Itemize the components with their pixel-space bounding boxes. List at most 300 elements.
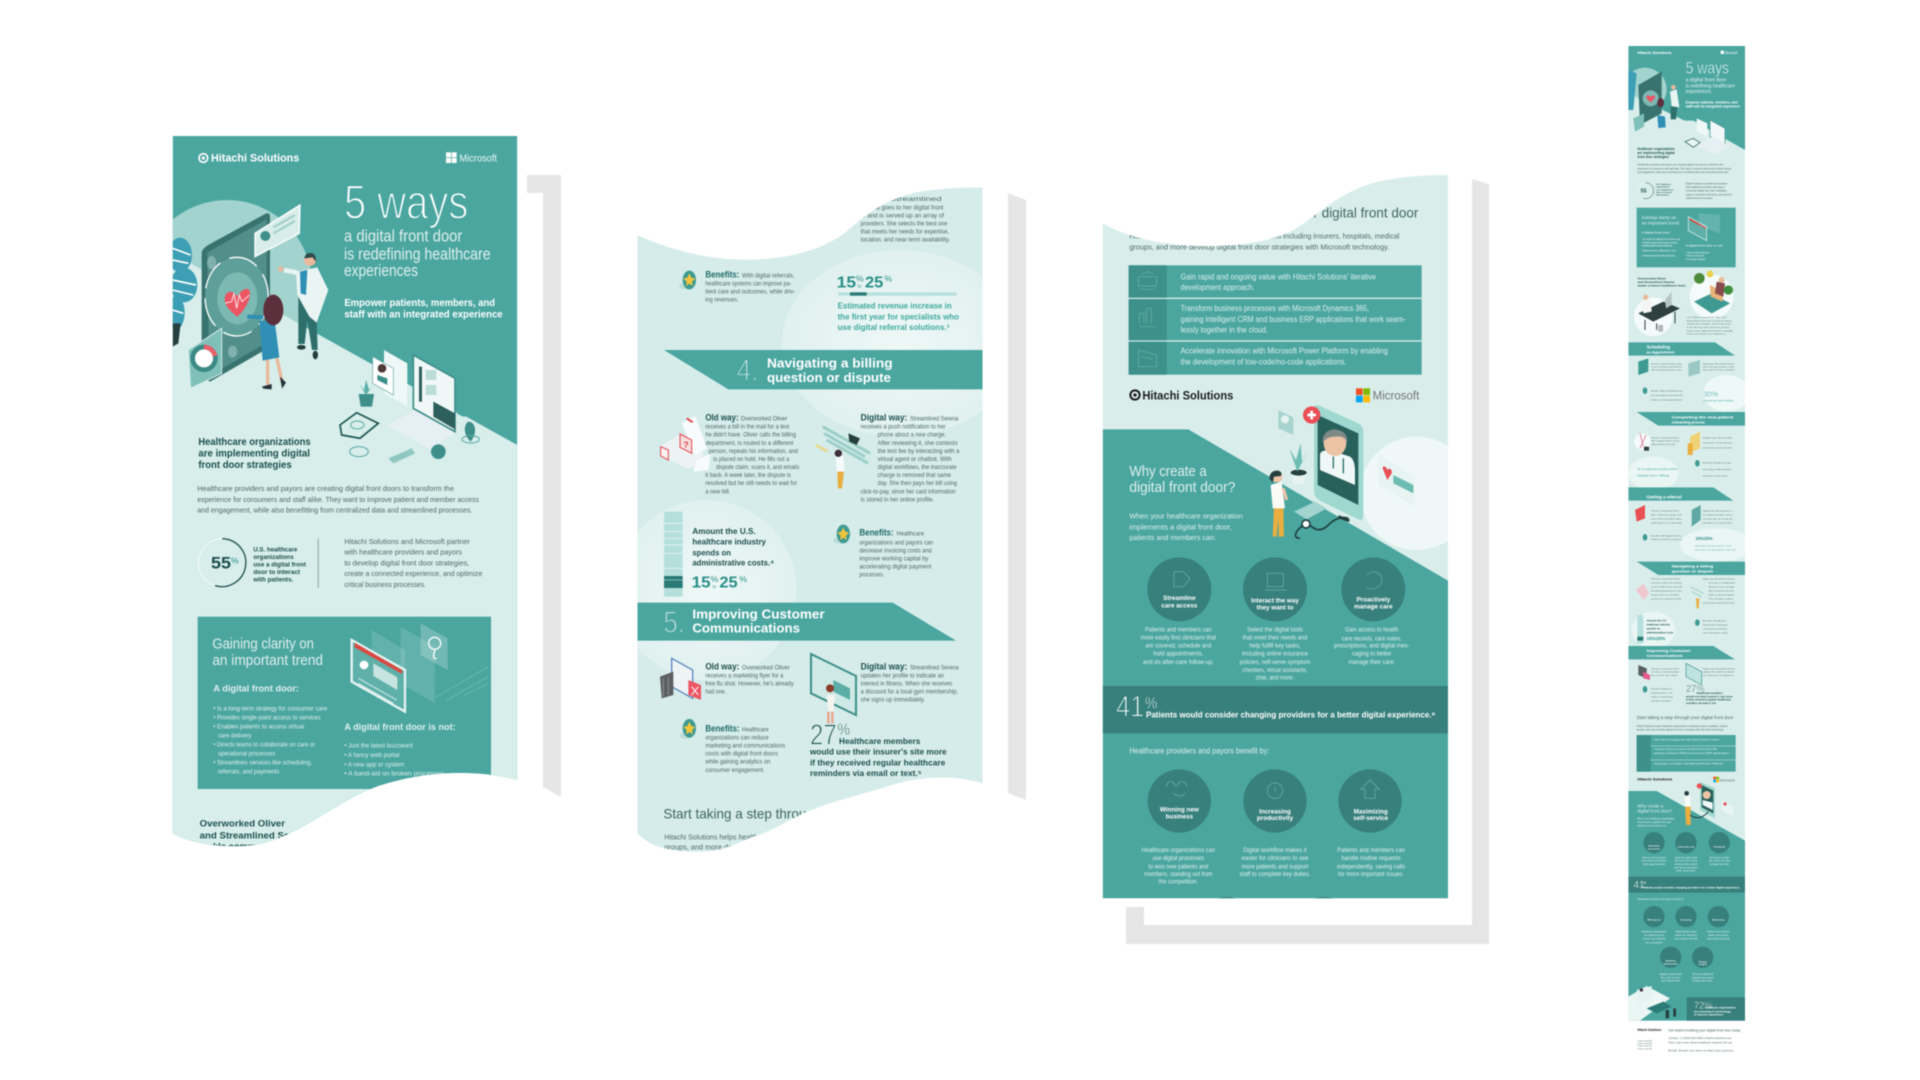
circle: winning new business: business xyxy=(1166,813,1194,820)
text: self-service description: independently, saving calls xyxy=(1337,863,1405,870)
illustration: plant leaves xyxy=(172,237,198,347)
text: streamline description: are covered, schedule and xyxy=(1145,643,1212,650)
list: what it is: • Directs teams to collaborate on care or xyxy=(213,742,316,749)
thumbnail band: completing the onboarding process: Completing the new-patient xyxy=(1672,414,1734,419)
thumbnail circles row two: Patients and members xyxy=(1707,931,1730,934)
thumbnail logos: Hitachi Solutions xyxy=(1637,777,1673,782)
text: proactively description: Gain access to health xyxy=(1345,627,1399,634)
heading: why create xyxy=(1129,463,1235,496)
illustration: phone with heart xyxy=(202,213,270,382)
heading: start taking a step: Start taking a step through your digital front door xyxy=(1130,204,1419,220)
text: benefits billing: accelerating digital payment xyxy=(859,564,932,571)
text: interact description: policies, self-serve symptom xyxy=(1240,659,1310,666)
text: old way billing: Old way: xyxy=(705,413,739,423)
text: benefits digital referrals xyxy=(705,269,795,303)
thumbnail section: communications content: receives a marketing flyer xyxy=(1651,671,1680,674)
text: benefits communications: marketing and communications xyxy=(705,742,785,749)
text: old way billing: is placed on hold. He fills out a xyxy=(713,456,790,463)
thumbnail text: intro: experience for consumers and staff alike. They want to improve patient and member access xyxy=(1637,166,1732,170)
stat: revenue increase number: to xyxy=(858,284,862,289)
circle: winning new business xyxy=(1148,769,1211,833)
text: old way marketing: free flu shot. However, he's already xyxy=(705,681,794,688)
thumbnail band: getting a referral xyxy=(1628,487,1733,501)
thumbnail footer: Contact: +1 (000) 000-0000 | hitachi-solutions.com xyxy=(1668,1037,1732,1040)
text: digital way marketing: Digital way: xyxy=(861,661,907,671)
thumbnail circles row three: experiences grow xyxy=(1692,976,1714,979)
thumbnail section: communications content: for a free flu shot xyxy=(1651,674,1678,677)
circle tops: next row xyxy=(1195,897,1355,960)
thumbnail section: communications content xyxy=(1638,663,1736,705)
stat: administrative costs caption xyxy=(692,526,774,568)
thumbnail callout: A digital front door: xyxy=(1642,231,1670,235)
thumbnail title: Empower patients, members, and xyxy=(1686,100,1737,104)
heading: implementing strategies: are implementing digital xyxy=(198,449,310,460)
thumbnail circles row three: insights xyxy=(1699,963,1708,966)
thumbnail circles row one: care records, care notes xyxy=(1708,860,1731,863)
list: what it is: care delivery xyxy=(218,733,252,740)
icon: benefit star badge xyxy=(833,525,850,544)
illustration: paper bill xyxy=(661,416,711,472)
thumbnail section: billing content xyxy=(1632,577,1736,648)
thumbnail section: billing content: and she pays using click-to-pay xyxy=(1703,601,1735,604)
text: benefits communications: organizations can reduce xyxy=(705,734,769,741)
illustration: flyer and trash xyxy=(660,658,701,700)
thumbnail text: intro: and engagement, while also benefitting from centralized data and streamlined processes. xyxy=(1637,170,1729,174)
text: benefits digital referrals: healthcare systems can improve pa- xyxy=(705,280,791,287)
text: streamline description: and do after-care follow-up. xyxy=(1143,659,1214,666)
partner paragraph: create a connected experience, and optimize xyxy=(344,569,482,578)
thumbnail section: referral content: providers to choose from xyxy=(1703,522,1732,525)
text: interact description: checkers, virtual assistants, xyxy=(1242,667,1308,674)
thumbnail stat: healthcare organizations 72 percent: Healthcare organizations xyxy=(1705,1006,1736,1009)
stat band: 41 percent: Patients would consider changing providers for a better digital experience.⁶ xyxy=(1146,709,1435,719)
text: benefit by heading: Healthcare providers and payors benefit by: xyxy=(1129,746,1269,755)
thumbnail circles row two: Digital workflow makes xyxy=(1675,931,1697,934)
thumbnail circles row two: more patients and staff xyxy=(1675,937,1698,940)
icon: benefit star badge xyxy=(679,271,696,289)
stat: 15 to 25 percent: to xyxy=(713,584,717,589)
illustration: shield and small icons xyxy=(340,413,479,463)
thumbnail band: improving customer communications xyxy=(1628,646,1735,659)
text: digital way marketing: updates her profile to indicate an xyxy=(861,673,944,680)
text: benefits billing: organizations and payors can xyxy=(859,539,934,546)
thumbnail section: communications content: Digital way: Streamlined Serena xyxy=(1703,667,1736,670)
text: when your organization: implements a digital front door, xyxy=(1129,522,1232,531)
intro paragraph: Healthcare providers and payors are creating digital front doors to transform the xyxy=(197,484,454,493)
subtitle: a digital front door xyxy=(344,227,463,246)
list: what it is: • Enables patients to access virtual xyxy=(213,724,304,731)
thumbnail circles row two: use digital processes xyxy=(1644,934,1665,937)
text: winning description: members, standing out from xyxy=(1144,871,1212,878)
circle: proactively manage care xyxy=(1341,557,1405,621)
thumbnail section: start taking a step: Transform business processes with Microsoft Dynamics 365, xyxy=(1654,748,1718,751)
thumbnail stat: 55 percent xyxy=(1638,181,1732,200)
text: Serena digital referral: that meets her needs for expertise, xyxy=(861,229,949,236)
thumbnail section: Oliver and Serena: visiting the hospital. Oliver's journey xyxy=(1687,323,1732,326)
text: benefits billing: processes. xyxy=(859,571,885,578)
list: what it is: • Provides single-point access to services xyxy=(213,715,321,722)
text: benefits digital referrals: Benefits: xyxy=(705,269,739,279)
thumbnail section: billing content: spends on xyxy=(1647,629,1661,631)
illustration: heart chart card xyxy=(1378,455,1415,507)
thumbnail section: scheduling content: opens the app and picks a time xyxy=(1703,365,1735,368)
illustration: standing patient xyxy=(1269,471,1287,537)
thumbnail why create: When your healthcare organization xyxy=(1637,817,1675,820)
text: productivity description: Digital workflow makes it xyxy=(1243,847,1307,854)
thumbnail why create: patients and members can: xyxy=(1637,825,1667,828)
thumbnail section: Oliver and Serena: Let's follow Overworked Oliver and xyxy=(1687,316,1727,319)
section band: navigating a billing question: 4. xyxy=(737,354,758,388)
thumbnail section: scheduling content: office during work hours, then xyxy=(1651,368,1683,371)
intro paragraph: experience for consumers and staff alike. They want to improve patient and member access xyxy=(197,495,479,504)
circle: maximizing self-service: self-service xyxy=(1353,815,1389,822)
stat: 55 percent ring: % xyxy=(231,556,239,566)
tagline: staff with an integrated experience xyxy=(344,309,503,320)
chart: revenue range bar xyxy=(838,292,957,296)
thumbnail illustration: hero xyxy=(1628,70,1730,155)
thumbnail section: referral content: first year for specialists who use xyxy=(1695,549,1737,552)
text: streamline description: more easily find clinicians that xyxy=(1141,635,1216,642)
subtitle xyxy=(344,227,491,280)
stat: revenue increase number: 15 xyxy=(837,274,856,291)
stat: administrative costs caption: Amount the U.S. xyxy=(692,526,756,536)
thumbnail callout: • A fancy web portal xyxy=(1686,255,1704,258)
thumbnail circles row three: Reducing xyxy=(1666,961,1676,963)
text: benefits digital referrals: With digital referrals, xyxy=(742,272,795,279)
thumbnail callout: • Enables patients to access virtual care xyxy=(1642,245,1673,248)
stat band: 41 percent xyxy=(1103,686,1448,733)
thumbnail callout: A digital front door is not: xyxy=(1686,244,1723,248)
thumbnail band: improving customer communications: Communications xyxy=(1647,653,1684,658)
thumbnail callout: • Streamlines services like scheduling xyxy=(1642,255,1676,258)
thumbnail section: billing content: The charge is gone xyxy=(1708,597,1734,600)
thumbnail callout: • Just the latest buzzword xyxy=(1686,251,1710,254)
thumbnail section: scheduling content xyxy=(1638,358,1750,412)
text: winning description: Healthcare organizations can xyxy=(1142,847,1215,854)
row: Power Platform xyxy=(1129,342,1422,375)
thumbnail why create xyxy=(1637,782,1733,828)
thumbnail circles row two: easier for clinicians xyxy=(1675,934,1698,937)
thumbnail section: billing content: the billing department, who xyxy=(1651,589,1683,592)
text: productivity description xyxy=(1240,847,1311,878)
list: what it is not: • A new app or system xyxy=(344,761,405,768)
illustration: floating profile card xyxy=(255,205,300,257)
thumbnail circles row two: the competition xyxy=(1645,941,1663,944)
thumbnail text: intro: Healthcare providers and payors are creating digital front doors to transform the xyxy=(1637,163,1724,167)
text: digital way marketing: interest in fitness. When she receives xyxy=(861,681,953,688)
illustration: translucent screens and card xyxy=(352,623,488,712)
stat: administrative costs caption: healthcare industry xyxy=(692,536,766,546)
text: old way billing: he didn't have. Oliver calls the billing xyxy=(705,432,796,439)
section band: improving customer communications: 5. xyxy=(663,606,685,640)
row: Dynamics 365: lessly together in the cloud. xyxy=(1181,326,1268,335)
thumbnail section: referral content: healthcare systems can improve xyxy=(1651,538,1682,541)
thumbnail section: billing content: Old way: Overworked Oliver xyxy=(1651,577,1681,580)
stat caption: revenue: the first year for specialists who xyxy=(838,312,959,322)
grey bracket: third page shadow xyxy=(1126,179,1489,944)
text: proactively description: saging to better xyxy=(1352,651,1391,658)
text: interact description: help fulfill key tasks, xyxy=(1249,643,1301,650)
thumbnail title: experiences xyxy=(1686,89,1711,95)
thumbnail circles row one: care access xyxy=(1648,848,1661,850)
thumbnail circles row two: to woo new patients xyxy=(1643,937,1666,940)
text: benefits communications xyxy=(704,724,785,774)
circle: increasing productivity xyxy=(1243,769,1307,833)
thumbnail stat band: 41 percent xyxy=(1628,877,1745,893)
text: digital way billing: day. She then pays her bill using xyxy=(878,480,957,487)
thumbnail stat: 55 percent: with patients. xyxy=(1656,194,1670,197)
text: old way billing: department, is routed to a different xyxy=(705,440,793,447)
thumbnail circles row one: including online policies xyxy=(1674,864,1698,866)
text: old way billing: person, repeats his information, and xyxy=(709,448,798,455)
thumbnail callout xyxy=(1637,208,1736,267)
illustration: telehealth phone with doctor xyxy=(1278,405,1363,520)
panel: page two billing and communications xyxy=(636,187,984,852)
thumbnail section: start taking a step: Accelerate innovation with Microsoft Power Platform xyxy=(1654,763,1723,766)
row: Power Platform: the development of low-code/no-code applications. xyxy=(1181,357,1346,366)
thumbnail section: scheduling content: reduces missed appointments. xyxy=(1651,398,1683,401)
thumbnail circles row three xyxy=(1659,947,1714,983)
thumbnail section: onboarding content: fills in paper forms at the xyxy=(1651,440,1680,443)
thumbnail circles row one: chat, and more. xyxy=(1676,870,1696,873)
row: Dynamics 365: gaining intelligent CRM and business ERP applications that work seam- xyxy=(1181,315,1406,324)
thumbnail section: onboarding content: office before his visit xyxy=(1651,443,1675,446)
text: Serena digital referral: providers. She selects the best one xyxy=(861,221,948,228)
thumbnail section: communications content: an interest in fitness xyxy=(1703,674,1733,677)
thumbnail stat: 55 percent: door to interact xyxy=(1656,191,1672,194)
panel: full infographic thumbnail xyxy=(1623,46,1753,1053)
text: old way billing: receives a bill in the mail for a test xyxy=(705,424,789,431)
text: self-service description xyxy=(1337,847,1405,878)
text: productivity description: more patients and support xyxy=(1242,863,1309,870)
thumbnail section: communications content: and gain analytics xyxy=(1651,699,1671,702)
thumbnail section: communications content: reduce marketing xyxy=(1651,695,1674,698)
text: interact description: that meet their needs and xyxy=(1243,635,1308,642)
section band: improving customer communications: Improving Customer xyxy=(692,607,825,621)
text: digital way marketing: she signs up immediately. xyxy=(861,697,925,704)
text: self-service description: handle routine requests xyxy=(1341,855,1401,862)
text: benefits communications: Benefits: xyxy=(705,724,740,734)
thumbnail circles row one: manage their care xyxy=(1710,863,1730,866)
thumbnail section: referral content: Digital way: Serena goes to xyxy=(1703,510,1733,513)
logo: Microsoft xyxy=(446,152,497,164)
thumbnail section: billing content: receives a bill in the mail for xyxy=(1651,581,1682,584)
stat caption: revenue: use digital referral solutions.³ xyxy=(838,322,950,332)
thumbnail callout: Gaining clarity on xyxy=(1642,215,1676,221)
thumbnail section: start taking a step: Hitachi Solutions helps healthcare organizations including insurers, hospitals, medical xyxy=(1637,725,1728,728)
panel: page three why create a digital front door xyxy=(1103,173,1473,960)
thumbnail section: scheduling content: 30% xyxy=(1703,390,1718,399)
thumbnail callout: • A new app or system xyxy=(1686,258,1706,261)
thumbnail stat band: 41 percent: Patients would consider changing providers for a better digital experience. xyxy=(1643,885,1740,889)
row: iterative development xyxy=(1129,265,1422,298)
thumbnail circles row one: Interact the way xyxy=(1678,845,1695,848)
thumbnail section: Oliver and Serena xyxy=(1634,271,1734,336)
thumbnail stat: healthcare organizations 72 percent: are investing in technology xyxy=(1694,1010,1731,1013)
chart: admin cost column xyxy=(664,512,683,597)
text: digital way marketing xyxy=(861,661,959,704)
heading: Oliver and Serena: and Streamlined Serena xyxy=(200,830,311,840)
text: digital way billing: is stored in her online profile. xyxy=(861,497,934,504)
thumbnail title: staff with an integrated experience xyxy=(1686,104,1740,108)
thumbnail section: billing content: costs and improve capital xyxy=(1703,632,1728,635)
thumbnail logos: Microsoft xyxy=(1720,778,1735,782)
thumbnail section: onboarding content: can reduce staff workload xyxy=(1703,468,1732,471)
thumbnail circles row two: Maximizing xyxy=(1713,920,1725,922)
thumbnail stat: 55 percent: organizations xyxy=(1656,186,1671,189)
stat: 55 percent ring xyxy=(198,539,246,587)
thumbnail header: Hitachi Solutions xyxy=(1637,51,1672,55)
thumbnail stat: 55 percent: use a digital front xyxy=(1656,188,1674,191)
text: self-service description: for more important issues. xyxy=(1338,871,1404,878)
text: digital way billing: virtual agent or chatbot. With xyxy=(878,456,952,463)
thumbnail stat: 55 percent: create a connected experience, and optimize xyxy=(1686,192,1732,196)
text: streamline description: Patients and members can xyxy=(1145,627,1212,634)
stat: 27 percent: reminders via email or text.⁵ xyxy=(810,768,922,778)
list: what it is: A digital front door: xyxy=(213,684,299,694)
text: benefits billing: decrease invoicing costs and xyxy=(859,547,932,554)
partner paragraph xyxy=(343,537,482,589)
thumbnail footer: 3. Source report, 2021 xyxy=(1637,1045,1652,1048)
callout: gaining clarity xyxy=(198,617,491,789)
text: winning description: to woo new patients and xyxy=(1148,863,1209,870)
text: winning description: use digital processes xyxy=(1152,855,1204,862)
circle: streamline care access: care access xyxy=(1161,603,1198,610)
thumbnail title: is redefining healthcare xyxy=(1686,83,1735,89)
thumbnail circles row two: Winning new xyxy=(1647,920,1661,922)
stat: 27 percent: would use their insurer's site more xyxy=(809,747,947,757)
thumbnail section: start taking a step: Start taking a step through your digital front door xyxy=(1637,715,1734,720)
text: streamline description xyxy=(1141,627,1216,666)
section band: navigating a billing question: question or dispute xyxy=(767,371,891,385)
stat: 15 to 25 percent: 25 xyxy=(719,574,738,591)
thumbnail title xyxy=(1686,58,1740,108)
thumbnail section: onboarding content: and data entry errors xyxy=(1703,475,1728,478)
thumbnail illustration: closing scene xyxy=(1628,986,1676,1021)
text: benefits communications: while gaining analytics on xyxy=(704,759,771,766)
intro paragraph xyxy=(197,484,479,515)
text: benefits billing: Benefits: xyxy=(859,528,894,538)
thumbnail callout: • Is a long-term strategy for consumer care xyxy=(1642,238,1681,241)
thumbnail section: billing content: can decrease invoicing xyxy=(1703,628,1728,631)
text: proactively description xyxy=(1334,627,1409,666)
thumbnail stat: 55 percent: 55 xyxy=(1641,188,1647,194)
text: winning description xyxy=(1142,847,1215,885)
thumbnail stat: 55 percent: critical business processes. xyxy=(1686,196,1713,200)
thumbnail section: start taking a step: groups, and more develop digital front door strategies with Microsoft technology. xyxy=(1637,728,1724,731)
thumbnail footer: Email: Reach our team to start your journey xyxy=(1668,1050,1735,1053)
text: proactively description: prescriptions, and digital mes- xyxy=(1334,643,1409,650)
thumbnail title: 5 ways xyxy=(1686,58,1729,77)
text: Serena digital referral: Serena goes to her digital front xyxy=(860,204,943,211)
illustration: interactive wall screen xyxy=(811,654,856,723)
thumbnail section: onboarding content: % of patients would prefer xyxy=(1637,467,1677,471)
text: digital way marketing: Streamlined Serena xyxy=(910,664,959,671)
text: old way billing: resolved but he still needs to wait for xyxy=(705,480,798,487)
text: old way marketing: Overworked Oliver xyxy=(742,664,790,671)
thumbnail why create: implements a digital front door, xyxy=(1637,821,1672,824)
thumbnail footer xyxy=(1637,1028,1740,1053)
thumbnail section: billing content: receives a notification xyxy=(1708,581,1736,584)
text: benefits communications: Healthcare xyxy=(742,727,769,734)
thumbnail band: getting a referral: Getting a referral xyxy=(1647,495,1682,500)
list: what it is not: A digital front door is not: xyxy=(344,722,456,732)
stat band: 41 percent: % xyxy=(1145,693,1157,712)
thumbnail section: referral content: her digital front door and is xyxy=(1703,514,1732,517)
heading: Oliver and Serena: tackle common healthcare tasks xyxy=(200,842,343,852)
thumbnail section: communications content: Benefits: Healthcare xyxy=(1651,687,1673,690)
illustration: person at digital screens xyxy=(815,427,870,488)
thumbnail stat: 55 percent: U.S. healthcare xyxy=(1656,183,1672,186)
thumbnail band: scheduling an appointment: an Appointment xyxy=(1647,350,1675,354)
row: iterative development: development approach. xyxy=(1181,283,1255,292)
stat: 15 to 25 percent xyxy=(692,574,747,591)
text: old way marketing: receives a marketing flyer for a xyxy=(705,673,784,680)
thumbnail section: communications content: Old way: Overworked Oliver xyxy=(1651,667,1680,670)
illustration: plant pot xyxy=(359,380,374,407)
table: capability rows xyxy=(1129,265,1422,375)
stat: 15 to 25 percent: % xyxy=(711,574,719,584)
thumbnail section: billing content: with a virtual agent. xyxy=(1708,593,1736,596)
stat caption: revenue: Estimated revenue increase in xyxy=(838,300,952,310)
text: benefits billing xyxy=(859,528,934,578)
text: benefits digital referrals: tient care and outcomes, while driv- xyxy=(705,288,795,295)
stat band: 41 percent: 41 xyxy=(1116,691,1144,724)
text: Serena digital referral: Streamlined xyxy=(890,196,942,203)
thumbnail section: billing content: administrative costs xyxy=(1647,632,1674,635)
thumbnail section: communications content: organizations can xyxy=(1651,691,1674,694)
text: interact description: Select the digital tools xyxy=(1247,627,1303,634)
text: digital way billing: digital workflows, the inaccurate xyxy=(878,464,957,471)
thumbnail circles row three: loyalty and care xyxy=(1693,980,1714,983)
text: Hitachi Solutions helps: groups, and more develop digital front door strategies with Microsoft technology. xyxy=(1129,242,1389,251)
text: interact description xyxy=(1240,627,1310,681)
thumbnail section: Oliver and Serena: tackle common healthcare tasks xyxy=(1638,284,1686,288)
thumbnail text: intro xyxy=(1637,147,1732,174)
text: digital way billing: Streamlined Serena xyxy=(910,416,959,423)
thumbnail band: navigating a billing question xyxy=(1637,562,1745,575)
heading: Oliver and Serena xyxy=(199,819,288,847)
panel: page one hero and intro xyxy=(142,136,517,857)
thumbnail section: billing content: a test he didn't have, and calls xyxy=(1651,585,1682,588)
thumbnail section: referral content: Benefits: With digital referrals, xyxy=(1651,535,1682,538)
thumbnail section: start taking a step: gaining intelligent CRM and business ERP applications xyxy=(1654,752,1730,755)
thumbnail circles row two: independently saving calls xyxy=(1707,937,1730,940)
thumbnail section: communications content: updates her profile to indicate xyxy=(1703,671,1735,674)
text: Hitachi Solutions helps: groups, and more develop digital front door strategies with Microsoft technology. xyxy=(664,842,924,851)
thumbnail teal section xyxy=(1628,791,1745,1021)
thumbnail stat: healthcare organizations 72 percent: to improve experiences xyxy=(1694,1014,1724,1017)
stat caption: with patients. xyxy=(252,576,294,583)
thumbnail section: onboarding content: out forms on her phone xyxy=(1703,441,1733,444)
thumbnail circles row one: Patients and members xyxy=(1642,856,1667,859)
text: Hitachi Solutions helps: Hitachi Solutions helps healthcare organizations including insurers, hospitals, medical xyxy=(664,832,935,841)
text: benefits communications: consumer engagement. xyxy=(705,767,765,774)
thumbnail stat band: 41 percent: % xyxy=(1643,880,1647,885)
illustration: paper bill: ? xyxy=(683,439,689,449)
thumbnail circles row three: Personalized xyxy=(1692,973,1714,976)
stat: administrative costs caption: administrative costs.⁴ xyxy=(692,558,774,568)
thumbnail stat: 55 percent: with healthcare providers and payors xyxy=(1686,185,1726,189)
thumbnail text: intro: front door strategies xyxy=(1637,155,1669,159)
stat: revenue increase number: % xyxy=(856,274,864,284)
thumbnail section: referral content: 15%25% xyxy=(1695,536,1713,541)
text: when your organization: When your healthcare organization xyxy=(1129,512,1243,521)
thumbnail section: billing content: Benefits: Healthcare xyxy=(1703,620,1727,623)
teal background shape xyxy=(1103,429,1448,898)
stat: 15 to 25 percent: 15 xyxy=(692,574,711,591)
thumbnail circles row two: Healthcare organizations xyxy=(1642,931,1667,934)
